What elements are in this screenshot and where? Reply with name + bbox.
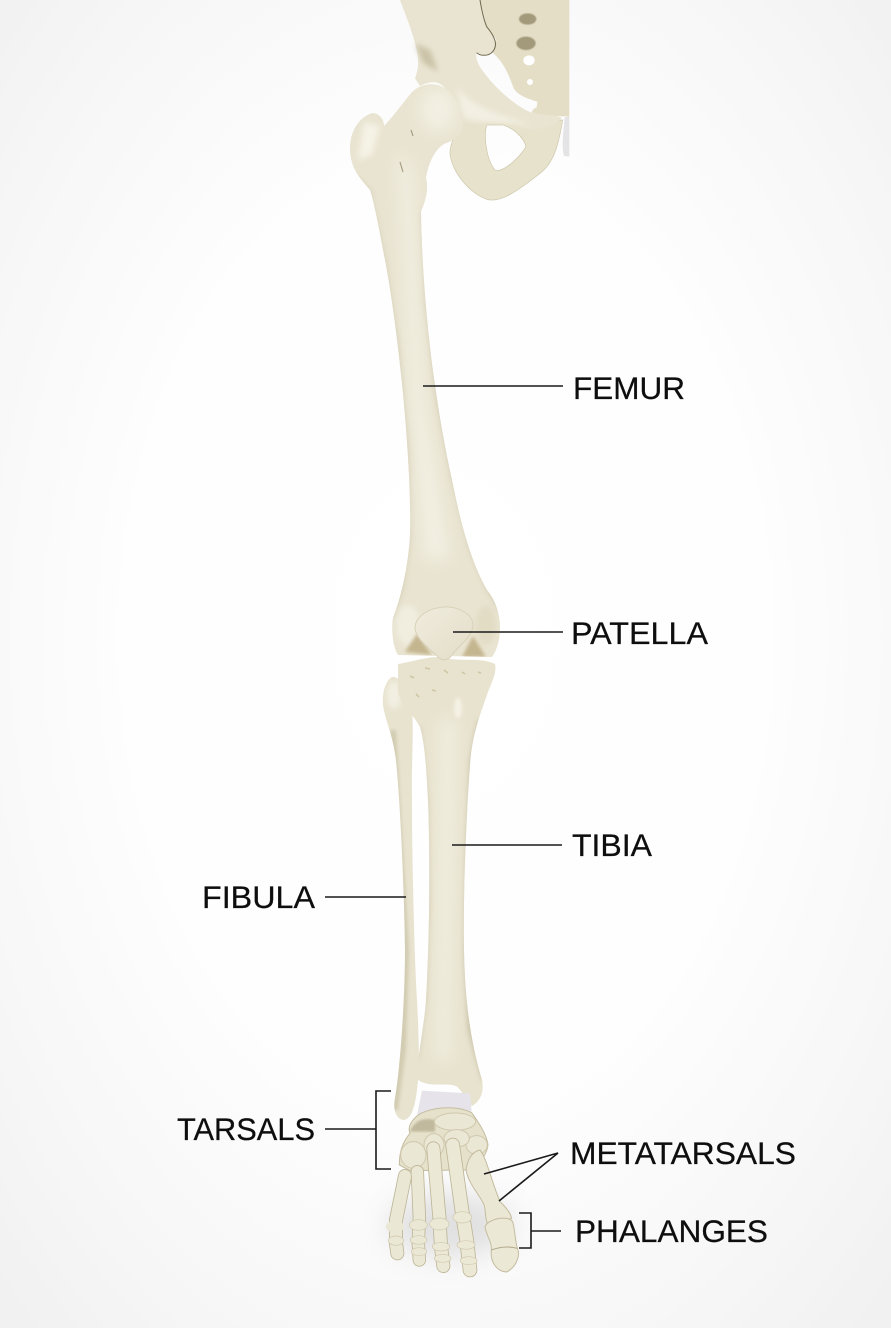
pubic symphysis: [563, 117, 569, 157]
big toe metatarsal: [466, 1150, 512, 1227]
label: metatarsals with two leader lines: METATARSALS: [570, 1135, 796, 1171]
label: phalanges with bracket: PHALANGES: [575, 1213, 768, 1249]
greater trochanter shading: [358, 122, 380, 160]
tarsal bones: [401, 1113, 487, 1168]
talus shadow: [410, 1119, 435, 1132]
skeleton illustration: [340, 0, 569, 1272]
fourth toe: [409, 1172, 427, 1260]
third toe: [430, 1148, 451, 1266]
ankle cartilage: [417, 1091, 472, 1117]
patella: [415, 607, 473, 660]
tarsal block: [399, 1108, 488, 1171]
iliac shading: [415, 43, 438, 72]
fibula head highlight: [387, 681, 401, 709]
sacrum: [480, 0, 569, 117]
tibial tuberosity: [454, 698, 462, 718]
big toe phalanges: [485, 1218, 518, 1272]
tibial plateau marks: [410, 668, 481, 697]
fibula: [382, 677, 419, 1120]
tibia: [398, 657, 496, 1106]
femoral head highlight: [420, 88, 456, 132]
femur left edge shading: [360, 178, 412, 618]
sacroiliac joint line: [477, 0, 495, 55]
condyle shadows: [405, 634, 432, 655]
pubic ramus: [450, 120, 563, 200]
label: metatarsals with two leader lines: [484, 1135, 796, 1201]
tibia edge shading: [419, 727, 432, 1056]
femur shaft highlight: [400, 167, 448, 560]
foot shadow: [388, 1193, 512, 1257]
label: tibia: TIBIA: [572, 827, 652, 863]
condyle highlights: [396, 606, 418, 644]
foot: [386, 1091, 518, 1272]
fifth toe: [386, 1176, 405, 1253]
ilium highlight: [457, 87, 533, 127]
second toe: [453, 1145, 477, 1270]
tibia right shading: [462, 719, 482, 1081]
femur: [350, 84, 500, 657]
fibula shading: [390, 730, 409, 1110]
label: tarsals with bracket: TARSALS: [177, 1111, 315, 1147]
femur right edge shading: [420, 212, 497, 608]
label: femur: FEMUR: [573, 370, 685, 406]
label: fibula: FIBULA: [202, 879, 315, 915]
tibia highlight: [436, 720, 456, 1060]
label: patella: PATELLA: [571, 615, 708, 651]
big toe joint line: [491, 1247, 517, 1250]
label: tarsals with bracket: [177, 1091, 391, 1169]
femoral neck marks: [400, 130, 413, 172]
pelvis: [400, 0, 569, 200]
sacral foramina: [516, 13, 536, 85]
ilium: [400, 0, 562, 130]
